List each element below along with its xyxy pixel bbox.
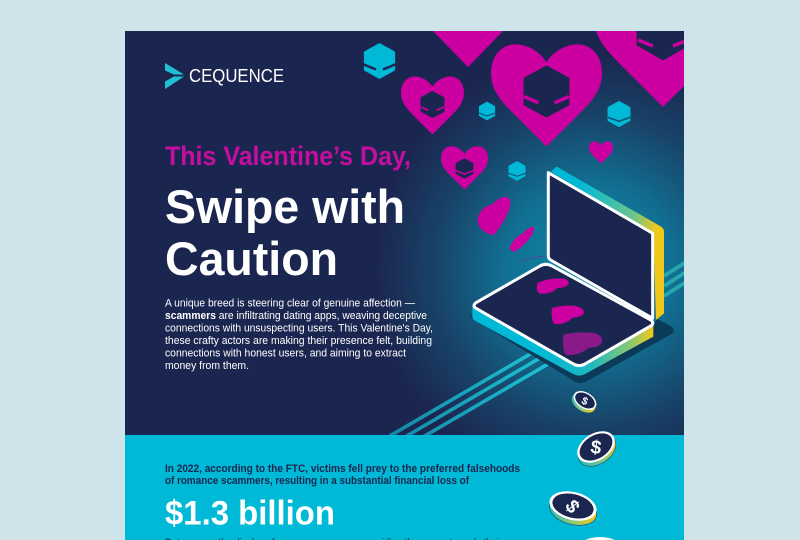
intro text block: connections with honest users, and aiming to extract bbox=[165, 348, 406, 360]
intro text block: A unique breed is steering clear of genuine affection — bbox=[165, 298, 415, 310]
stripes: lower left bbox=[388, 353, 548, 437]
stripes: right bbox=[664, 262, 686, 296]
heart: small with hexagon bbox=[441, 146, 488, 190]
intro text block: scammers are infiltrating dating apps, weaving deceptive bbox=[165, 310, 427, 322]
statistic value: $1.3 billion bbox=[165, 494, 335, 532]
intro text block: these crafty actors are making their presence felt, building bbox=[165, 335, 432, 347]
heart: top centre bbox=[433, 31, 503, 67]
laptop screen bbox=[548, 173, 653, 318]
laptop shadow bbox=[469, 313, 674, 383]
intro text block bbox=[165, 298, 433, 372]
tilted heart bbox=[478, 197, 510, 235]
laptop screen back bbox=[551, 167, 664, 320]
coin 1: $ bbox=[579, 395, 590, 408]
panel: statistic bbox=[125, 435, 684, 540]
laptop illustration bbox=[469, 167, 674, 383]
icon: cyan hexagon near laptop bbox=[508, 162, 526, 180]
coin 2: $ bbox=[589, 437, 603, 459]
heart: plain small bbox=[589, 141, 613, 164]
icon: cyan hexagon large bbox=[362, 45, 397, 77]
statistic lead text: In 2022, according to the FTC, victims fell prey to the preferred falsehoods bbox=[165, 463, 520, 475]
screen heart 1 bbox=[537, 278, 569, 294]
heading: title: Caution bbox=[165, 233, 338, 286]
icon: cyan hexagon right bbox=[606, 102, 632, 126]
logo wordmark: CEQUENCE bbox=[189, 66, 284, 86]
statistic lead text: of romance scammers, resulting in a substantial financial loss of bbox=[165, 475, 469, 487]
icon: logo chevron bbox=[165, 63, 184, 89]
coin 2 bbox=[571, 425, 622, 473]
screen heart 2 bbox=[552, 306, 584, 324]
heading: kicker: This Valentine’s Day, bbox=[165, 141, 411, 171]
logo bbox=[165, 63, 284, 89]
coin 3: $ bbox=[560, 496, 584, 518]
coin 3 bbox=[546, 487, 600, 530]
screen heart 3 bbox=[563, 332, 602, 355]
heading: title bbox=[165, 181, 405, 286]
intro text block: money from them. bbox=[165, 360, 249, 372]
laptop base side bbox=[472, 306, 653, 376]
panel: hero bbox=[125, 31, 684, 435]
tilted heart sliver bbox=[509, 227, 534, 252]
coin 4 bbox=[578, 537, 622, 540]
intro text block: connections with unsuspecting users. This Valentine's Day, bbox=[165, 322, 433, 334]
heading: title: Swipe with bbox=[165, 181, 405, 234]
coin 1 bbox=[568, 387, 600, 417]
heart: medium with hexagon bbox=[401, 77, 464, 134]
heart: large with hexagon bbox=[491, 44, 602, 146]
statistic lead text bbox=[165, 463, 520, 487]
faint heart edge bbox=[518, 256, 545, 262]
icon: cyan hexagon small bbox=[478, 103, 496, 119]
heart: top right with hexagon bbox=[596, 31, 684, 107]
laptop base top bbox=[474, 264, 653, 366]
